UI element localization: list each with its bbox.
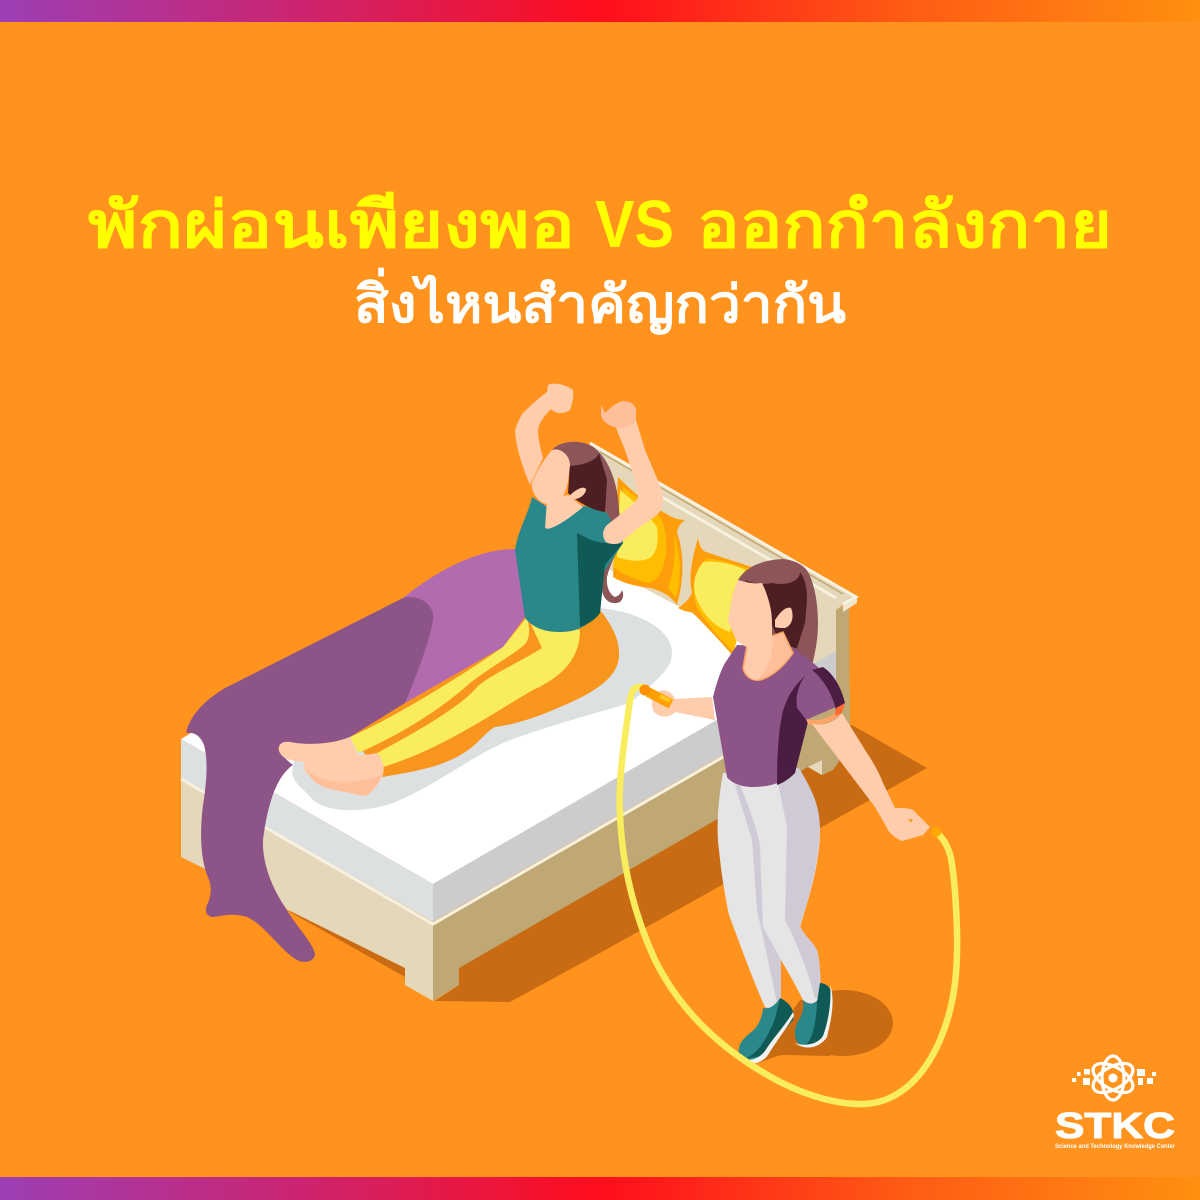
person 1 ear bbox=[568, 488, 586, 499]
bottom gradient bar bbox=[0, 1177, 1200, 1200]
person 2 dark hair bbox=[745, 572, 807, 650]
person 2 left arm bbox=[652, 690, 715, 720]
person 2 right arm and hand bbox=[812, 713, 930, 841]
blanket bbox=[186, 549, 530, 962]
mattress top bbox=[181, 570, 836, 884]
logo atom icon bbox=[1088, 1056, 1138, 1100]
person 1 right arm bbox=[603, 420, 663, 544]
legs shadow bbox=[350, 610, 619, 777]
person 1 right fist bbox=[601, 401, 636, 428]
person 1 hair back bbox=[568, 453, 607, 512]
person 1: stretching woman bbox=[279, 384, 663, 796]
bed frame right face bbox=[433, 690, 850, 1001]
logo wordmark: STKC bbox=[1055, 1105, 1175, 1146]
feet shadow bbox=[755, 990, 893, 1063]
person 2 hair bbox=[738, 559, 818, 680]
rope handle left bbox=[640, 684, 671, 704]
back bed foot bbox=[808, 760, 822, 775]
top gradient bar bbox=[0, 0, 1200, 22]
logo caption: Science and Technology Knowledge Center bbox=[1055, 1144, 1176, 1150]
title: ออกกำลังกาย bbox=[697, 189, 1112, 261]
person 1 neck bbox=[545, 495, 583, 529]
person 1 left fist bbox=[547, 384, 573, 413]
illustration: bed bbox=[181, 442, 857, 1001]
blanket shadow on mattress bbox=[292, 608, 672, 810]
person 1 face bbox=[532, 449, 570, 504]
person 2 neck highlight bbox=[744, 640, 773, 680]
person 2 ear bbox=[775, 608, 793, 628]
bed trim line bbox=[181, 692, 836, 924]
person 1 trousers bbox=[350, 617, 580, 767]
rope handle right bbox=[908, 819, 941, 837]
skipping rope bbox=[620, 687, 957, 1104]
title: VS bbox=[595, 187, 674, 262]
title bbox=[88, 187, 1112, 262]
illustration: floor shadows bbox=[280, 725, 927, 1002]
bed frame left face bbox=[181, 780, 433, 1001]
mattress right side bbox=[433, 651, 836, 922]
person 2 shoes bbox=[738, 983, 833, 1064]
mattress left side bbox=[181, 739, 433, 922]
logo pixel squares bbox=[1072, 1069, 1156, 1085]
person 2: woman with skipping rope bbox=[652, 559, 930, 1064]
person 2 shirt bbox=[713, 645, 845, 787]
headboard bbox=[590, 442, 857, 752]
person 1 hair tail bbox=[552, 442, 623, 603]
pillow 2 bbox=[678, 538, 752, 656]
pillows bbox=[613, 477, 752, 656]
person 2 face bbox=[728, 580, 772, 647]
STKC logo bbox=[1055, 1056, 1176, 1150]
person 1 shirt bbox=[515, 497, 623, 632]
pillow 1 bbox=[613, 477, 685, 605]
person 2 trousers bbox=[718, 768, 820, 1008]
person 1 left arm bbox=[515, 392, 552, 485]
person 2 neck bbox=[743, 632, 793, 680]
person 1 feet bbox=[279, 737, 384, 796]
title: พักผ่อนเพียงพอ bbox=[88, 189, 575, 261]
subtitle: สิ่งไหนสำคัญกว่ากัน bbox=[354, 268, 846, 335]
